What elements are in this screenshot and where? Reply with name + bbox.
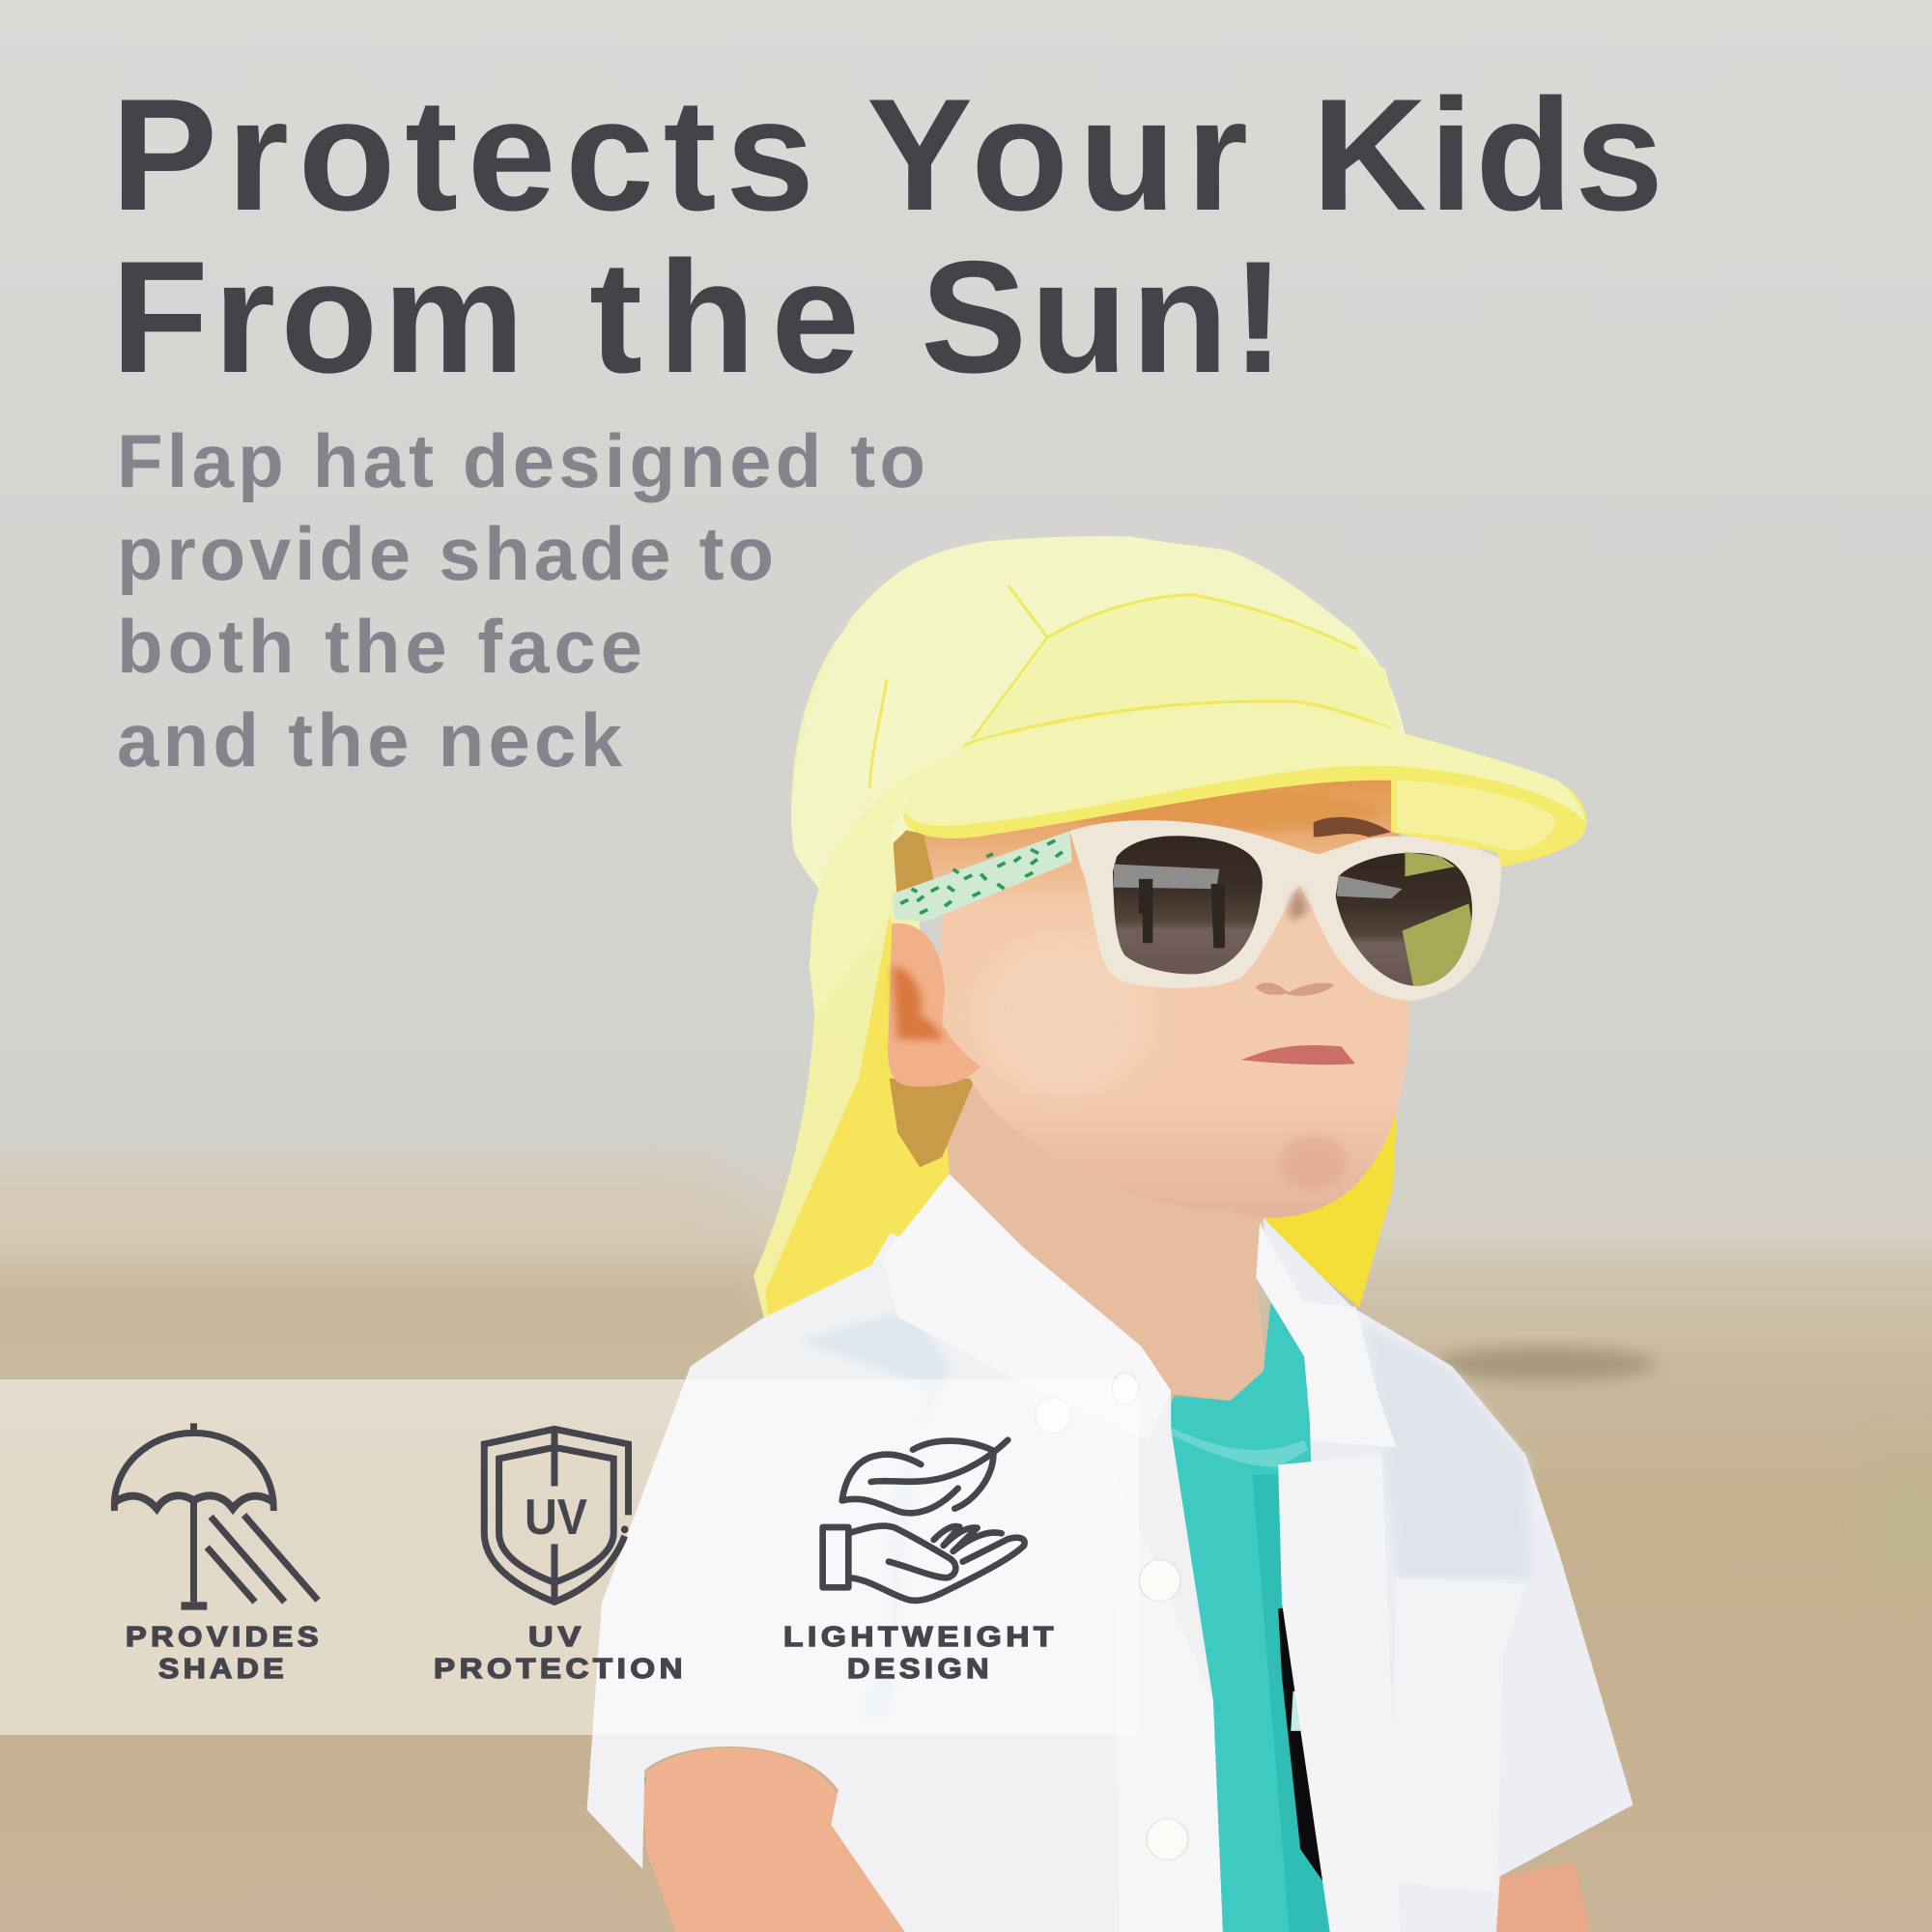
white shirt	[587, 1174, 1634, 1932]
icon: UV shield	[484, 1429, 629, 1602]
subtitle: provide shade to	[117, 511, 774, 596]
label: UV protection: PROTECTION	[434, 1654, 687, 1685]
subtitle: and the neck	[117, 697, 623, 782]
sunglasses frame	[1069, 820, 1502, 1001]
title: the	[589, 228, 860, 406]
left neck flap	[753, 620, 976, 1330]
title: From	[111, 228, 525, 406]
label: provides shade: SHADE	[158, 1654, 288, 1685]
photo: child wearing flap hat and sunglasses	[587, 536, 1634, 1932]
arms	[642, 1747, 1591, 1932]
UV letters on shield: UV	[525, 1490, 587, 1546]
collar right	[1256, 1223, 1397, 1447]
neck	[942, 1080, 1319, 1401]
hat brim rim	[903, 708, 1587, 867]
eyebrow	[1314, 817, 1391, 838]
subtitle	[117, 418, 925, 782]
shirt pocket	[1389, 1578, 1526, 1893]
label: provides shade	[126, 1622, 323, 1685]
hair	[890, 827, 986, 1167]
hat seams	[870, 585, 1391, 798]
icon: umbrella with sun rays	[114, 1423, 318, 1610]
mouth	[1241, 1045, 1355, 1065]
label: lightweight design: LIGHTWEIGHT	[783, 1622, 1058, 1653]
sunglasses	[893, 820, 1502, 1001]
label: UV protection	[434, 1622, 687, 1685]
label: UV protection: UV	[528, 1622, 585, 1653]
shirt buttons	[1035, 1373, 1188, 1861]
subtitle: Flap hat designed to	[117, 418, 925, 503]
hat brim top surface	[906, 708, 1585, 826]
subtitle: both the face	[117, 604, 642, 689]
title	[111, 66, 1663, 406]
label: lightweight design	[783, 1622, 1058, 1685]
translucent icon panel	[0, 1379, 1139, 1735]
leaf	[842, 1440, 1008, 1513]
patterned temple arm	[893, 831, 1072, 922]
t-shirt black graphic	[1278, 1606, 1332, 1894]
collar left	[883, 1174, 1171, 1440]
ear	[888, 923, 980, 1087]
hat flap fold	[809, 758, 942, 1014]
shirt right placket	[1278, 1455, 1400, 1932]
title: Kids	[1312, 66, 1663, 243]
label: lightweight design: DESIGN	[847, 1654, 993, 1685]
icon: leaf over open hand	[823, 1440, 1025, 1601]
head and hat	[791, 536, 1587, 1218]
title: Protects	[111, 66, 814, 243]
right lens	[1336, 852, 1472, 986]
face	[920, 773, 1409, 1218]
title: Your	[867, 66, 1248, 243]
teal t-shirt	[1156, 1302, 1332, 1932]
label: provides shade: PROVIDES	[126, 1622, 323, 1653]
hat brim underside	[1397, 781, 1555, 851]
hat crown	[791, 536, 1405, 889]
left lens	[1113, 836, 1263, 974]
nose	[1234, 888, 1336, 996]
right neck flap	[1245, 1021, 1402, 1307]
title: Sun!	[921, 228, 1285, 406]
hand	[823, 1526, 1025, 1601]
